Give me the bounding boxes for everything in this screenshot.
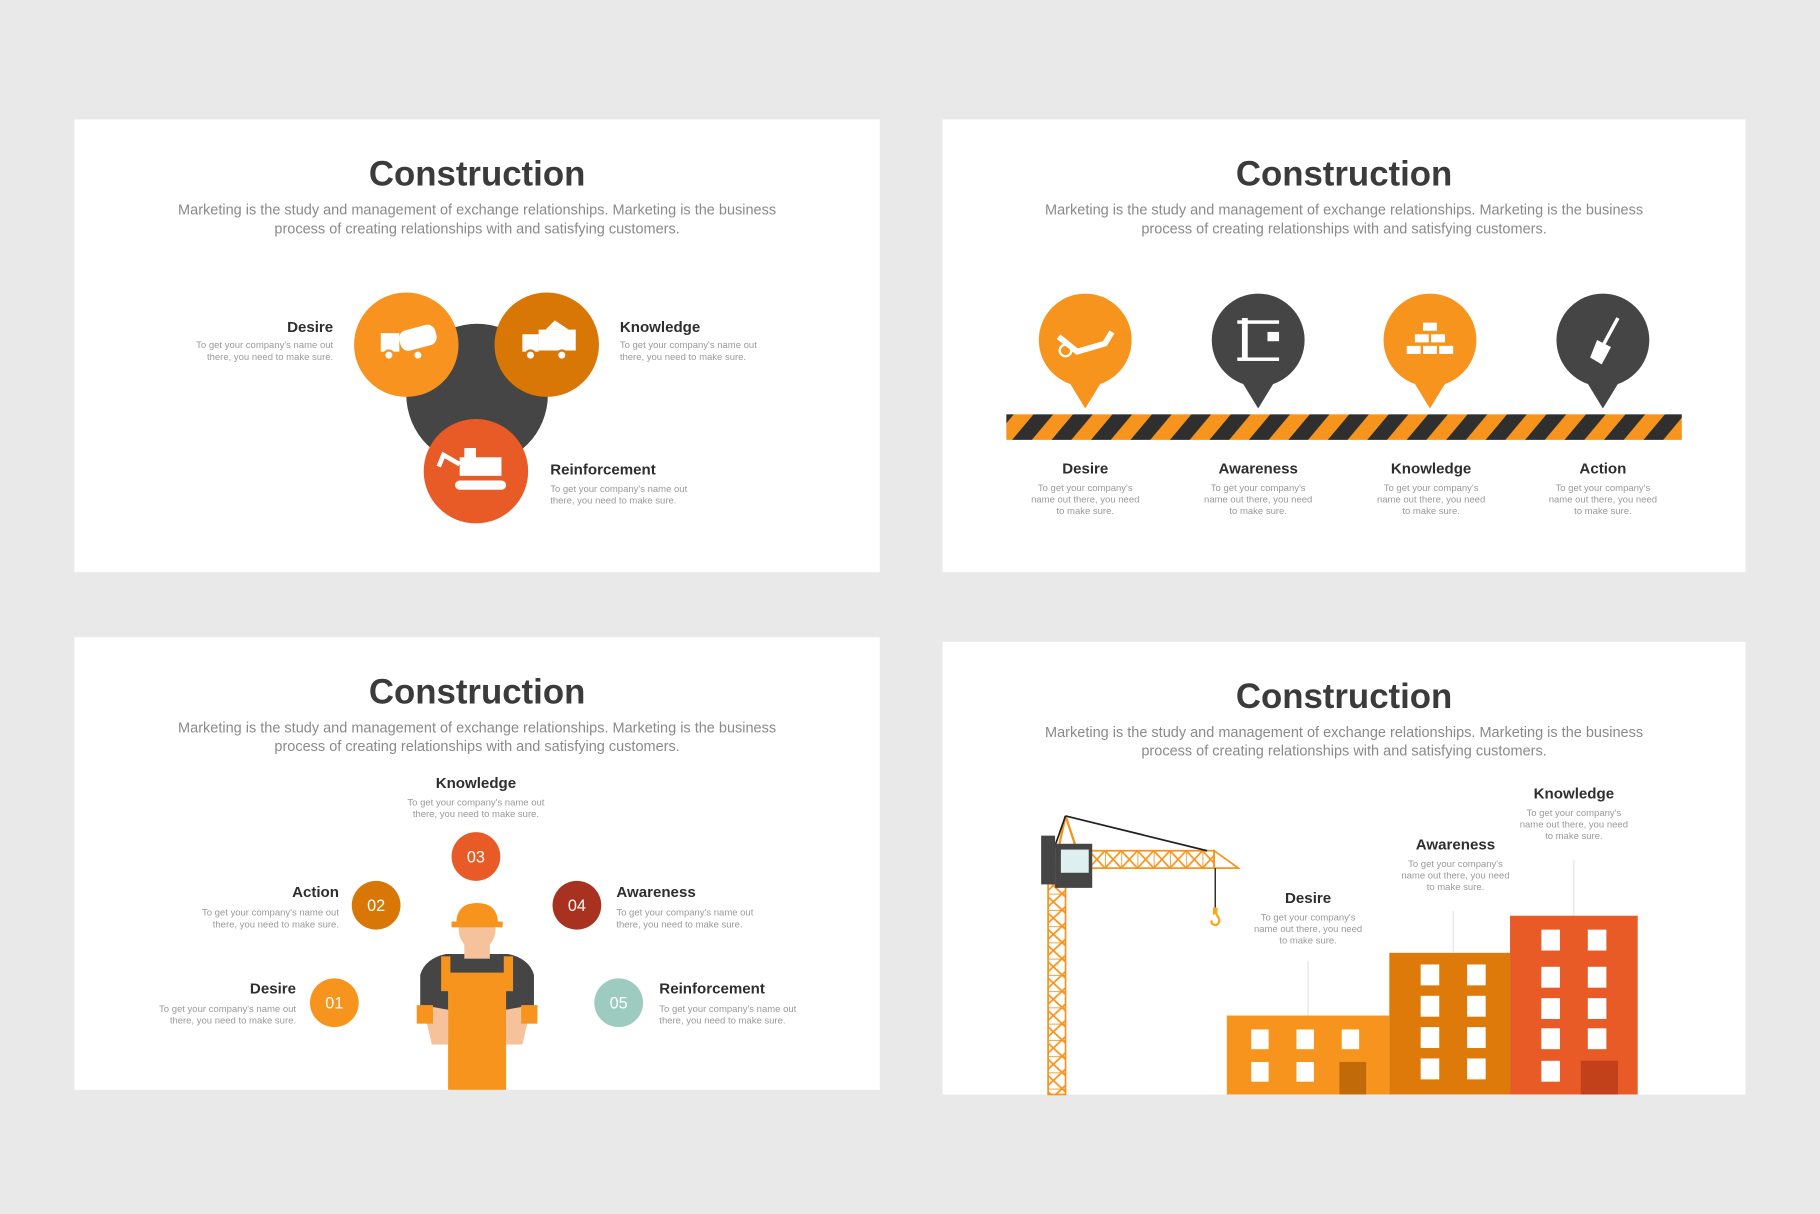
subtitle: process of creating relationships with and satisfying customers.	[274, 221, 680, 237]
label: desire: Desire	[287, 319, 333, 336]
label: awareness	[616, 884, 754, 930]
label: knowledge	[1520, 786, 1628, 842]
label: awareness: To get your company's name out	[616, 908, 753, 919]
circle 03	[452, 832, 500, 881]
hazard stripe bar	[1006, 414, 1682, 440]
subtitle: process of creating relationships with and satisfying customers.	[1141, 744, 1547, 760]
center dark circle	[406, 324, 548, 465]
worker figure	[417, 903, 537, 1090]
label: awareness: there, you need to make sure.	[616, 919, 743, 930]
label: reinforcement	[550, 462, 688, 507]
title: Construction	[1236, 677, 1452, 716]
label: reinforcement: there, you need to make sure.	[659, 1016, 786, 1027]
panel: venn circles	[74, 120, 880, 572]
circle: desire truck	[354, 292, 459, 397]
label: reinforcement	[659, 980, 797, 1027]
label: desire: To get your company's	[1261, 912, 1355, 923]
label: desire: Desire	[1062, 461, 1108, 478]
label: awareness: name out there, you need	[1204, 495, 1312, 506]
subtitle: Marketing is the study and management of exchange relationships. Marketing is the business	[1045, 725, 1643, 741]
circle 03: 03	[467, 848, 485, 866]
label: knowledge: Knowledge	[1391, 461, 1471, 478]
label: knowledge: there, you need to make sure.	[620, 352, 746, 363]
subtitle: Marketing is the study and management of exchange relationships. Marketing is the business	[178, 720, 776, 736]
label: action	[1549, 461, 1657, 517]
circle: reinforcement excavator	[424, 419, 528, 523]
label: knowledge: To get your company's name out	[620, 340, 757, 351]
label: knowledge: To get your company's	[1526, 808, 1621, 819]
label: reinforcement: To get your company's name out	[659, 1004, 796, 1015]
label: awareness	[1204, 461, 1312, 517]
label: action: To get your company's	[1556, 483, 1650, 494]
pin: bricks	[1384, 294, 1476, 409]
label: awareness: to make sure.	[1427, 882, 1484, 893]
building: knowledge	[1510, 916, 1638, 1094]
label: knowledge: there, you need to make sure.	[413, 809, 539, 820]
crane	[1041, 816, 1238, 1094]
label: knowledge: Knowledge	[436, 775, 516, 792]
label: desire: name out there, you need	[1031, 495, 1139, 506]
title: Construction	[369, 672, 585, 711]
circle: knowledge dump truck	[495, 292, 599, 397]
building: awareness	[1389, 953, 1510, 1094]
label: knowledge	[620, 319, 757, 363]
label: awareness: To get your company's	[1408, 859, 1503, 870]
label: desire: there, you need to make sure.	[170, 1016, 296, 1027]
label: knowledge	[1377, 461, 1485, 517]
label: awareness: name out there, you need	[1401, 871, 1510, 882]
label: desire	[159, 980, 296, 1027]
label: action: Action	[292, 884, 339, 901]
label: reinforcement: Reinforcement	[550, 462, 656, 479]
circle 01	[310, 978, 359, 1027]
subtitle: Marketing is the study and management of exchange relationships. Marketing is the business	[178, 203, 776, 219]
title: Construction	[369, 155, 585, 194]
label: knowledge: To get your company's name out	[407, 797, 544, 808]
label: desire	[196, 319, 334, 363]
circle 01: 01	[325, 995, 343, 1013]
label: knowledge: name out there, you need	[1520, 820, 1628, 831]
panel: crane and buildings	[942, 642, 1746, 1094]
label: action: name out there, you need	[1549, 495, 1657, 506]
title: Construction	[1236, 155, 1452, 194]
label: action: To get your company's name out	[202, 908, 339, 919]
label: awareness: to make sure.	[1229, 506, 1287, 517]
label: awareness: Awareness	[616, 884, 696, 901]
label: knowledge: Knowledge	[1534, 786, 1614, 803]
label: desire: To get your company's name out	[196, 340, 333, 351]
label: knowledge	[407, 775, 545, 820]
label: reinforcement: there, you need to make sure.	[550, 496, 676, 507]
label: desire: to make sure.	[1279, 936, 1337, 947]
circle 04: 04	[568, 897, 586, 915]
label: desire: Desire	[250, 980, 296, 997]
label: reinforcement: Reinforcement	[659, 980, 765, 997]
subtitle: process of creating relationships with and satisfying customers.	[1141, 221, 1547, 237]
label: desire	[1031, 461, 1139, 517]
circle 05: 05	[610, 995, 628, 1013]
label: desire: To get your company's name out	[159, 1004, 296, 1015]
label: action: Action	[1579, 461, 1626, 478]
label: awareness: Awareness	[1219, 461, 1298, 478]
label: knowledge: Knowledge	[620, 319, 700, 336]
label: action: to make sure.	[1574, 506, 1632, 517]
label: action: there, you need to make sure.	[213, 919, 339, 930]
label: awareness: To get your company's	[1211, 483, 1306, 494]
pin: crane	[1212, 294, 1305, 409]
label: knowledge: to make sure.	[1402, 506, 1460, 517]
label: desire: there, you need to make sure.	[207, 352, 333, 363]
label: desire: To get your company's	[1038, 483, 1133, 494]
label: desire: to make sure.	[1056, 506, 1114, 517]
label: desire	[1254, 890, 1362, 947]
pin: shovel	[1556, 294, 1649, 409]
building: desire	[1227, 1016, 1389, 1094]
panel: timeline pins	[942, 120, 1746, 572]
label: knowledge: to make sure.	[1545, 831, 1603, 842]
label: awareness: Awareness	[1416, 837, 1495, 854]
label: desire: Desire	[1285, 890, 1331, 907]
circle 05	[594, 978, 643, 1027]
label: reinforcement: To get your company's name out	[550, 484, 687, 495]
label: desire: name out there, you need	[1254, 924, 1362, 935]
subtitle: process of creating relationships with and satisfying customers.	[274, 739, 680, 755]
subtitle: Marketing is the study and management of exchange relationships. Marketing is the business	[1045, 203, 1643, 219]
circle 02: 02	[367, 897, 385, 915]
pin: wheelbarrow	[1039, 294, 1132, 409]
circle 02	[352, 881, 400, 930]
connector lines	[1308, 860, 1574, 1016]
label: knowledge: name out there, you need	[1377, 495, 1485, 506]
label: action	[202, 884, 339, 930]
circle 04	[553, 881, 601, 930]
panel: worker	[74, 637, 880, 1090]
label: knowledge: To get your company's	[1384, 483, 1478, 494]
label: awareness	[1401, 837, 1510, 893]
